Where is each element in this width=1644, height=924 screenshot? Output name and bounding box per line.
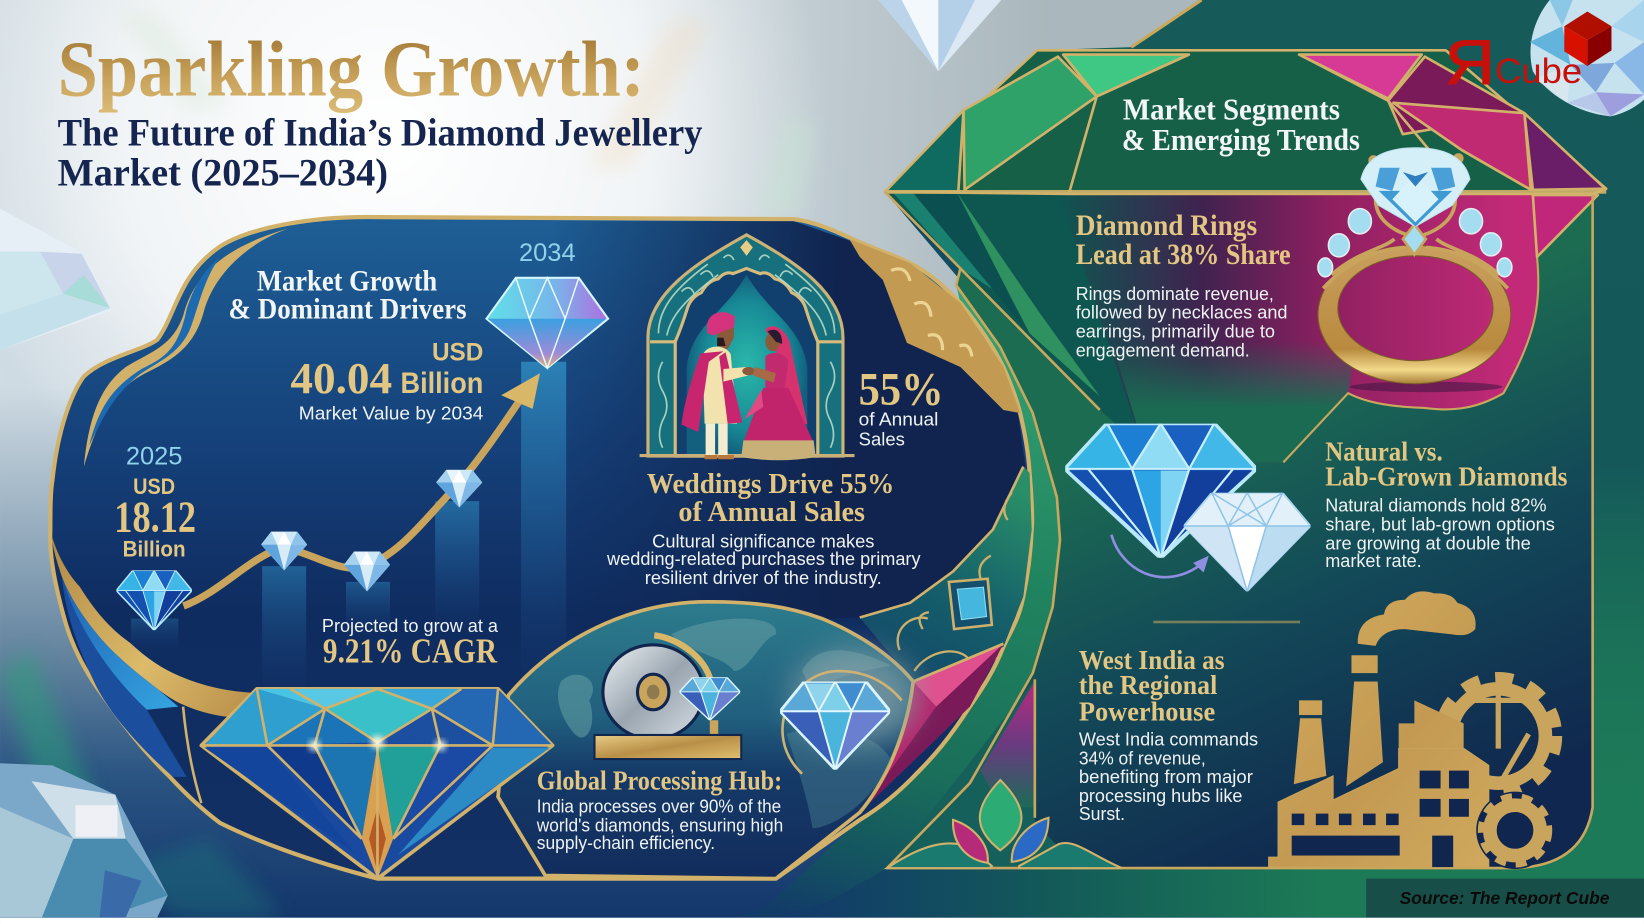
shape: purple sliver [980,681,1035,807]
icon: bottom-left diamond [0,763,168,917]
text: CAGR [322,615,499,671]
text: weddings block: wedding-related purchases the primary [606,548,921,569]
text: weddings block: of Annual Sales [678,497,865,528]
source box [1366,879,1644,917]
text: market segments heading [1122,93,1360,157]
text: 2034 value [290,239,576,423]
text: global processing hub: supply-chain efficiency. [537,832,715,853]
text: diamond rings: engagement demand. [1076,339,1250,360]
icon: gem on cutter [679,677,740,720]
text: 2034 value: 2034 [519,239,576,267]
source box: Source: The Report Cube [1400,888,1609,908]
icon: small gear [1476,792,1554,869]
text: natural vs lab-grown: are growing at double the [1325,532,1531,553]
text: west india: West India as [1079,645,1225,675]
icon: magenta wedge [860,644,1003,813]
text: 2025 value: USD [133,474,175,499]
icon: big gear [1441,678,1556,794]
text: west india: benefiting from major [1079,766,1253,787]
text: diamond rings: Diamond Rings [1076,210,1257,242]
illustration: wedding arch [640,235,855,460]
border: right panel gold line [885,192,1593,868]
shape: lower-left gusset [887,679,1080,868]
icon: gold base [594,720,741,759]
text: 2025 value: Billion [123,537,186,562]
ornament: lotus jewels [887,780,1122,868]
text: 2034 value: 40.04 [290,354,392,403]
ring shoulders [1323,199,1508,288]
crescent [52,536,257,717]
text: west india: West India commands [1079,728,1258,749]
text: weddings block: Cultural significance makes [652,530,874,551]
text: west india [1079,645,1258,824]
icon: left pale diamond [0,209,112,350]
text: diamond rings: Lead at 38% Share [1076,239,1291,271]
facet: crown [885,50,1606,257]
chart: bars [131,362,566,692]
line: magenta outline [1283,257,1538,462]
icon: cyan square gem [949,579,992,629]
chart: growth arrow line [183,373,540,606]
shape: blue wedge under crescent [62,577,178,710]
ribbon: gold top-left [84,229,288,467]
text: 55 percent: 55% [859,364,944,415]
facet: deep teal [913,193,1026,330]
figure: groom [682,312,755,459]
icon: ring [1318,148,1512,392]
text: market segments heading: & Emerging Trends [1122,123,1360,157]
icon: top-right faceted diamond [1530,0,1644,116]
facet: magenta under-gem [1059,194,1598,462]
text: CAGR: Projected to grow at a [322,615,499,636]
panel: market segments gem [885,50,1606,868]
text: 55 percent: Sales [859,429,905,450]
text: diamond rings: earrings, primarily due to [1076,321,1275,342]
subtitle: Market (2025–2034) [58,152,388,195]
map: continents [558,619,891,828]
wedge: blue top-left [89,257,220,446]
text: market segments heading: Market Segments [1123,93,1340,127]
icon: natural diamond [1065,424,1256,558]
text: natural vs lab-grown [1325,436,1567,571]
text: market growth heading: & Dominant Drivers [229,294,467,326]
text: 2025 value [114,442,196,562]
icon: 2034 diamond [486,278,608,368]
text: 55 percent: of Annual [859,409,938,430]
text: weddings block [606,469,921,588]
text: global processing hub: Global Processing Hub: [537,765,782,795]
text: natural vs lab-grown: Natural vs. [1325,436,1443,466]
arrow: natural to lab-grown [1111,535,1209,577]
panel: market growth [50,217,1032,879]
text: west india: 34% of revenue, [1079,747,1206,768]
shape: deep blue wedge [62,577,187,777]
panel: global processing globe [498,602,917,879]
icon: globe diamond [780,681,890,770]
text: CAGR: 9.21% CAGR [323,633,498,671]
stone: centre diamond [1361,148,1470,226]
icon: chart diamonds [116,470,482,630]
logo: RCube [1445,12,1611,98]
text: west india: Powerhouse [1079,696,1215,726]
text: west india: Surst. [1079,803,1125,824]
text: market growth heading [229,265,467,326]
text: natural vs lab-grown: share, but lab-grown options [1325,514,1555,535]
title: Sparkling Growth: [58,25,645,113]
text: 2025 value: 18.12 [114,493,196,542]
text: natural vs lab-grown: market rate. [1325,550,1422,571]
icon: saw blade [603,635,711,739]
subtitle: The Future of India’s Diamond Jewellery [58,112,703,155]
shape: green band [755,285,1060,917]
text: global processing hub: world's diamonds, ensuring high [536,814,783,835]
ornament: teal scroll area [860,467,1032,681]
facet: dark left under crown [885,192,1159,461]
text: 2034 value: Billion [401,367,483,400]
subtitle [58,112,703,195]
text: natural vs lab-grown: Natural diamonds hold 82% [1325,495,1546,516]
text: weddings block: Weddings Drive 55% [647,469,894,500]
figure: bride [741,326,816,460]
icon: factory with gears [1269,591,1556,869]
shading: magenta fades into green [1111,341,1356,462]
text: west india: processing hubs like [1079,785,1242,806]
text: diamond rings [1076,210,1291,360]
text: 2034 value: Market Value by 2034 [299,402,483,423]
text: global processing hub [536,765,783,853]
text: diamond rings: Rings dominate revenue, [1076,283,1274,304]
facet: bright green streak [957,193,1100,396]
logo: RCube: Cube [1495,51,1582,91]
panel: lower dark body [885,192,1593,868]
text: 2034 value: USD [432,339,483,367]
halo arc [782,671,902,774]
text: weddings block: resilient driver of the industry. [645,567,882,588]
facet: teal sliver [893,193,993,289]
text: west india: the Regional [1079,670,1218,700]
icon: top pale diamond [879,0,1001,71]
icon: big centre diamond [201,689,553,879]
text: 2025 value: 2025 [126,442,182,470]
shading: right grey glow [792,650,917,744]
panel: right background [734,0,1644,917]
text: global processing hub: India processes over 90% of the [537,796,781,817]
text: natural vs lab-grown: Lab-Grown Diamonds [1325,461,1567,491]
icon: lab-grown diamond [1184,493,1311,591]
ornament: gold arch scroll [849,239,1020,413]
text: 55 percent [859,364,944,450]
stones: side accents [1318,209,1512,277]
logo: RCube: Я [1445,28,1495,98]
text: diamond rings: followed by necklaces and [1076,302,1288,323]
text: market growth heading: Market Growth [257,265,437,297]
